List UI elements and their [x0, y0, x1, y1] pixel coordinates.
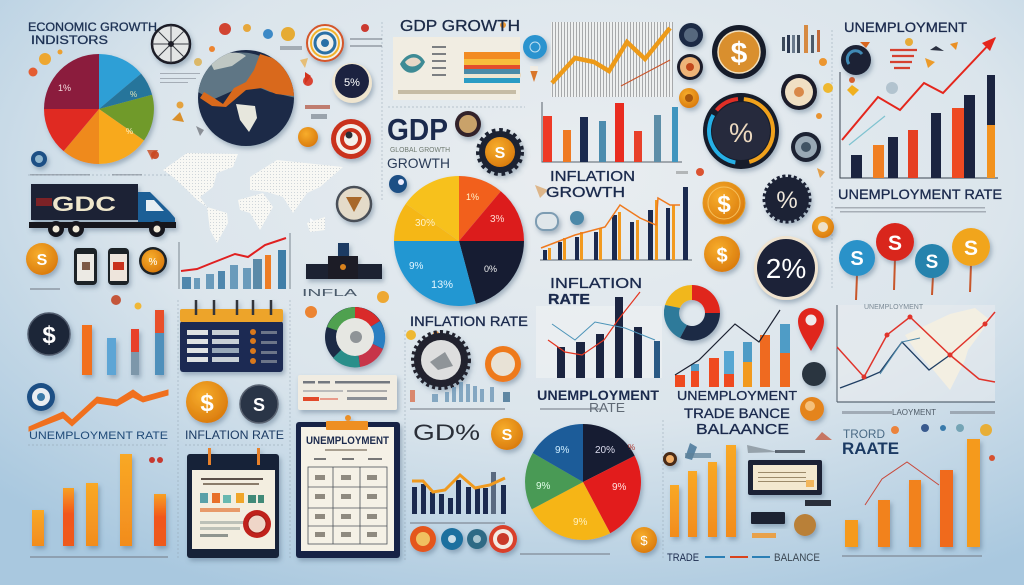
pins row: S: [850, 248, 864, 270]
title: trade rate: [842, 427, 899, 458]
truck labeled GDC: GDC: [52, 193, 116, 216]
icon: blue button: [523, 35, 547, 59]
title: economic growth indicators: INDISTORS: [31, 33, 108, 47]
small orange coin: [679, 88, 699, 108]
coin: small: [663, 452, 677, 466]
title: unemployment rate: UNEMPLOYMENT RATE: [838, 186, 1002, 202]
icon: percent badge: [332, 63, 372, 103]
truck labeled GDC: [29, 184, 176, 237]
icon: orange ring: [485, 346, 521, 382]
pins row: S: [888, 232, 902, 255]
icon: globe: [198, 50, 298, 146]
icon: dark swatch circle: [841, 45, 871, 75]
title: inflation growth: INFLATION: [550, 168, 635, 185]
bar chart: inflation rate with lines: [536, 292, 662, 378]
title: trade balance: [677, 388, 797, 438]
badge: 2 percent: 2%: [766, 253, 806, 284]
beige badge: [781, 74, 817, 110]
pie chart: top left: %: [130, 90, 137, 99]
coin: S: [491, 418, 523, 450]
coin: S: S: [502, 427, 513, 444]
coin: inflation dollar: [186, 381, 228, 423]
gauge: %: [729, 118, 753, 148]
panel: gdp report card: [393, 37, 520, 100]
title: inflation rate middle: INFLATION RATE: [410, 313, 528, 329]
title: inflation growth: GROWTH: [546, 184, 625, 201]
pins row: S: [964, 237, 978, 260]
bar chart: gd percent: [412, 472, 506, 514]
title: trade balance: TRADE BANCE: [684, 405, 790, 421]
icon: dial wheel: [152, 25, 190, 63]
red map pin: [798, 308, 824, 351]
title: unemployment rate center: RATE: [589, 400, 625, 415]
title: gd percent: GD%: [413, 420, 480, 445]
title: economic growth indicators: [28, 20, 157, 47]
title: gdp: [387, 112, 450, 171]
small label: inflation: INFLA: [302, 288, 358, 299]
labels: trade balance footer: TRADE: [667, 552, 699, 564]
icon: blue circle: [389, 175, 407, 193]
title: unemployment rate center: UNEMPLOYMENT: [537, 387, 659, 403]
title: inflation growth: [546, 168, 635, 201]
pie chart: center: 3%: [490, 214, 505, 225]
pie chart: center: 1%: [466, 192, 479, 202]
bar chart: lower left: [32, 454, 166, 546]
pins row: [839, 223, 990, 300]
icon: dollar coin large: [712, 25, 766, 79]
pill icons: [536, 211, 584, 230]
pie chart: center: 30%: [415, 218, 435, 229]
grey badge: [791, 132, 821, 162]
icon: dollar coin: [703, 182, 745, 224]
bar chart: trade with black line: [675, 310, 790, 387]
coin row with tags: [26, 243, 167, 285]
icon: rainbow ring badge: [307, 25, 343, 61]
title: unemployment: UNEMPLOYMENT: [844, 19, 967, 35]
donut chart: [664, 285, 720, 341]
bar chart: top center: [542, 102, 682, 162]
title: trade rate: TRORD: [843, 427, 885, 441]
dark fingerprint icon: [802, 362, 826, 386]
small device and object: [751, 500, 831, 538]
icon: gear coin: S: [495, 145, 506, 162]
dark dollar coin: $: [42, 322, 56, 349]
bar chart: left blocks: [82, 310, 164, 375]
labels: trade balance footer: [667, 552, 820, 564]
orange trend band: [29, 390, 168, 431]
bar chart with red trend line: [179, 233, 290, 289]
bar chart: unemployment: [840, 37, 998, 178]
pie chart: top left: [44, 54, 154, 164]
faint histogram: [410, 382, 510, 402]
bar chart: trade rate: [845, 439, 980, 547]
icon: gear coin: [479, 131, 521, 173]
panel: map line chart: LAOYMENT: [892, 408, 936, 417]
icon: percent scalloped badge: [765, 177, 809, 221]
orange badge: [800, 397, 824, 421]
title: trade balance: UNEMPLOYMENT: [677, 388, 797, 403]
icon: dollar coin: $: [717, 191, 731, 218]
title: trade rate: RAATE: [842, 439, 899, 458]
coin row with tags: S: [37, 252, 48, 269]
title: gdp: GDP: [387, 112, 448, 147]
title: economic growth indicators: ECONOMIC GROWTH: [28, 20, 157, 34]
dark dollar coin: [28, 313, 70, 355]
pie chart: lower center: 9%: [555, 445, 570, 456]
pins row: S: [926, 252, 938, 273]
icon: small blue circle: [31, 151, 47, 167]
title: trade balance: BALAANCE: [696, 421, 789, 438]
pie chart: lower center: 9%: [612, 482, 627, 493]
coin: dark S: S: [253, 395, 265, 415]
small orange ring coin: [812, 216, 834, 238]
badge: 2 percent: [754, 236, 818, 300]
labels: trade balance footer: BALANCE: [774, 552, 820, 564]
icon: small orange coin: [298, 127, 318, 147]
line chart: gold trend: [551, 22, 673, 97]
gauge: [703, 93, 779, 169]
icon: gear lens: [414, 333, 468, 387]
clipboard table: UNEMPLOYMENT: [306, 435, 389, 447]
small coin: top right cluster dark: [679, 23, 703, 47]
pie chart: center: 13%: [431, 279, 453, 291]
coin: dark S: [240, 385, 278, 423]
pie chart: lower center: [525, 424, 641, 540]
icon: target: [331, 119, 371, 159]
icon: magnifier lens: [337, 187, 371, 221]
pie chart: center: [394, 176, 524, 306]
pie chart: center: 9%: [409, 261, 424, 272]
coin: below pie: [631, 527, 657, 553]
title: inflation rate upper: INFLATION: [550, 275, 642, 292]
title: gdp: GROWTH: [387, 155, 450, 171]
badge row: [410, 525, 517, 553]
title: inflation rate upper: RATE: [548, 291, 590, 308]
coin row with tags: %: [149, 257, 158, 268]
title: unemployment rate center: [537, 387, 659, 415]
pie chart: top left: %: [126, 127, 133, 136]
title: unemployment rate left: UNEMPLOYMENT RATE: [29, 430, 168, 442]
panel: map line chart: [837, 304, 995, 417]
title: inflation rate: INFLATION RATE: [185, 428, 284, 442]
pie chart: center: 0%: [484, 264, 497, 274]
panel: map line chart: UNEMPLOYMENT: [864, 304, 924, 311]
small badge: [677, 54, 703, 80]
bar chart: inflation growth: [540, 187, 692, 260]
pie chart: lower center: 20%: [595, 445, 615, 456]
notice board: [187, 448, 279, 558]
podium icon: [306, 243, 382, 279]
icon: percent scalloped badge: %: [776, 187, 798, 214]
pie chart: top left: 1%: [58, 83, 71, 93]
pie chart: lower center: 9%: [536, 481, 551, 492]
coin: below pie: $: [640, 533, 648, 548]
icon: percent badge: 5%: [344, 77, 360, 89]
world map: [163, 153, 343, 243]
icon: dollar coin lower: $: [716, 245, 728, 267]
icon: dollar coin lower: [704, 236, 740, 272]
bar chart: trade balance: [670, 445, 736, 537]
pie chart: lower center: 9%: [573, 517, 588, 528]
title: inflation rate upper: [548, 275, 642, 308]
blue ring badge: [27, 383, 55, 411]
card: data strip: [298, 375, 397, 410]
icon: dollar coin large: $: [731, 37, 748, 70]
icon: brown badge: [455, 111, 481, 137]
small percent label: %: [628, 443, 635, 452]
calendar: [180, 300, 283, 372]
title: gdp: GLOBAL GROWTH: [390, 147, 450, 154]
title: gdp growth: GDP GROWTH: [400, 18, 520, 35]
clipboard table: [296, 415, 400, 558]
multicolor ring: [325, 307, 385, 367]
coin: inflation dollar: $: [200, 390, 214, 417]
device screen: [748, 460, 822, 495]
